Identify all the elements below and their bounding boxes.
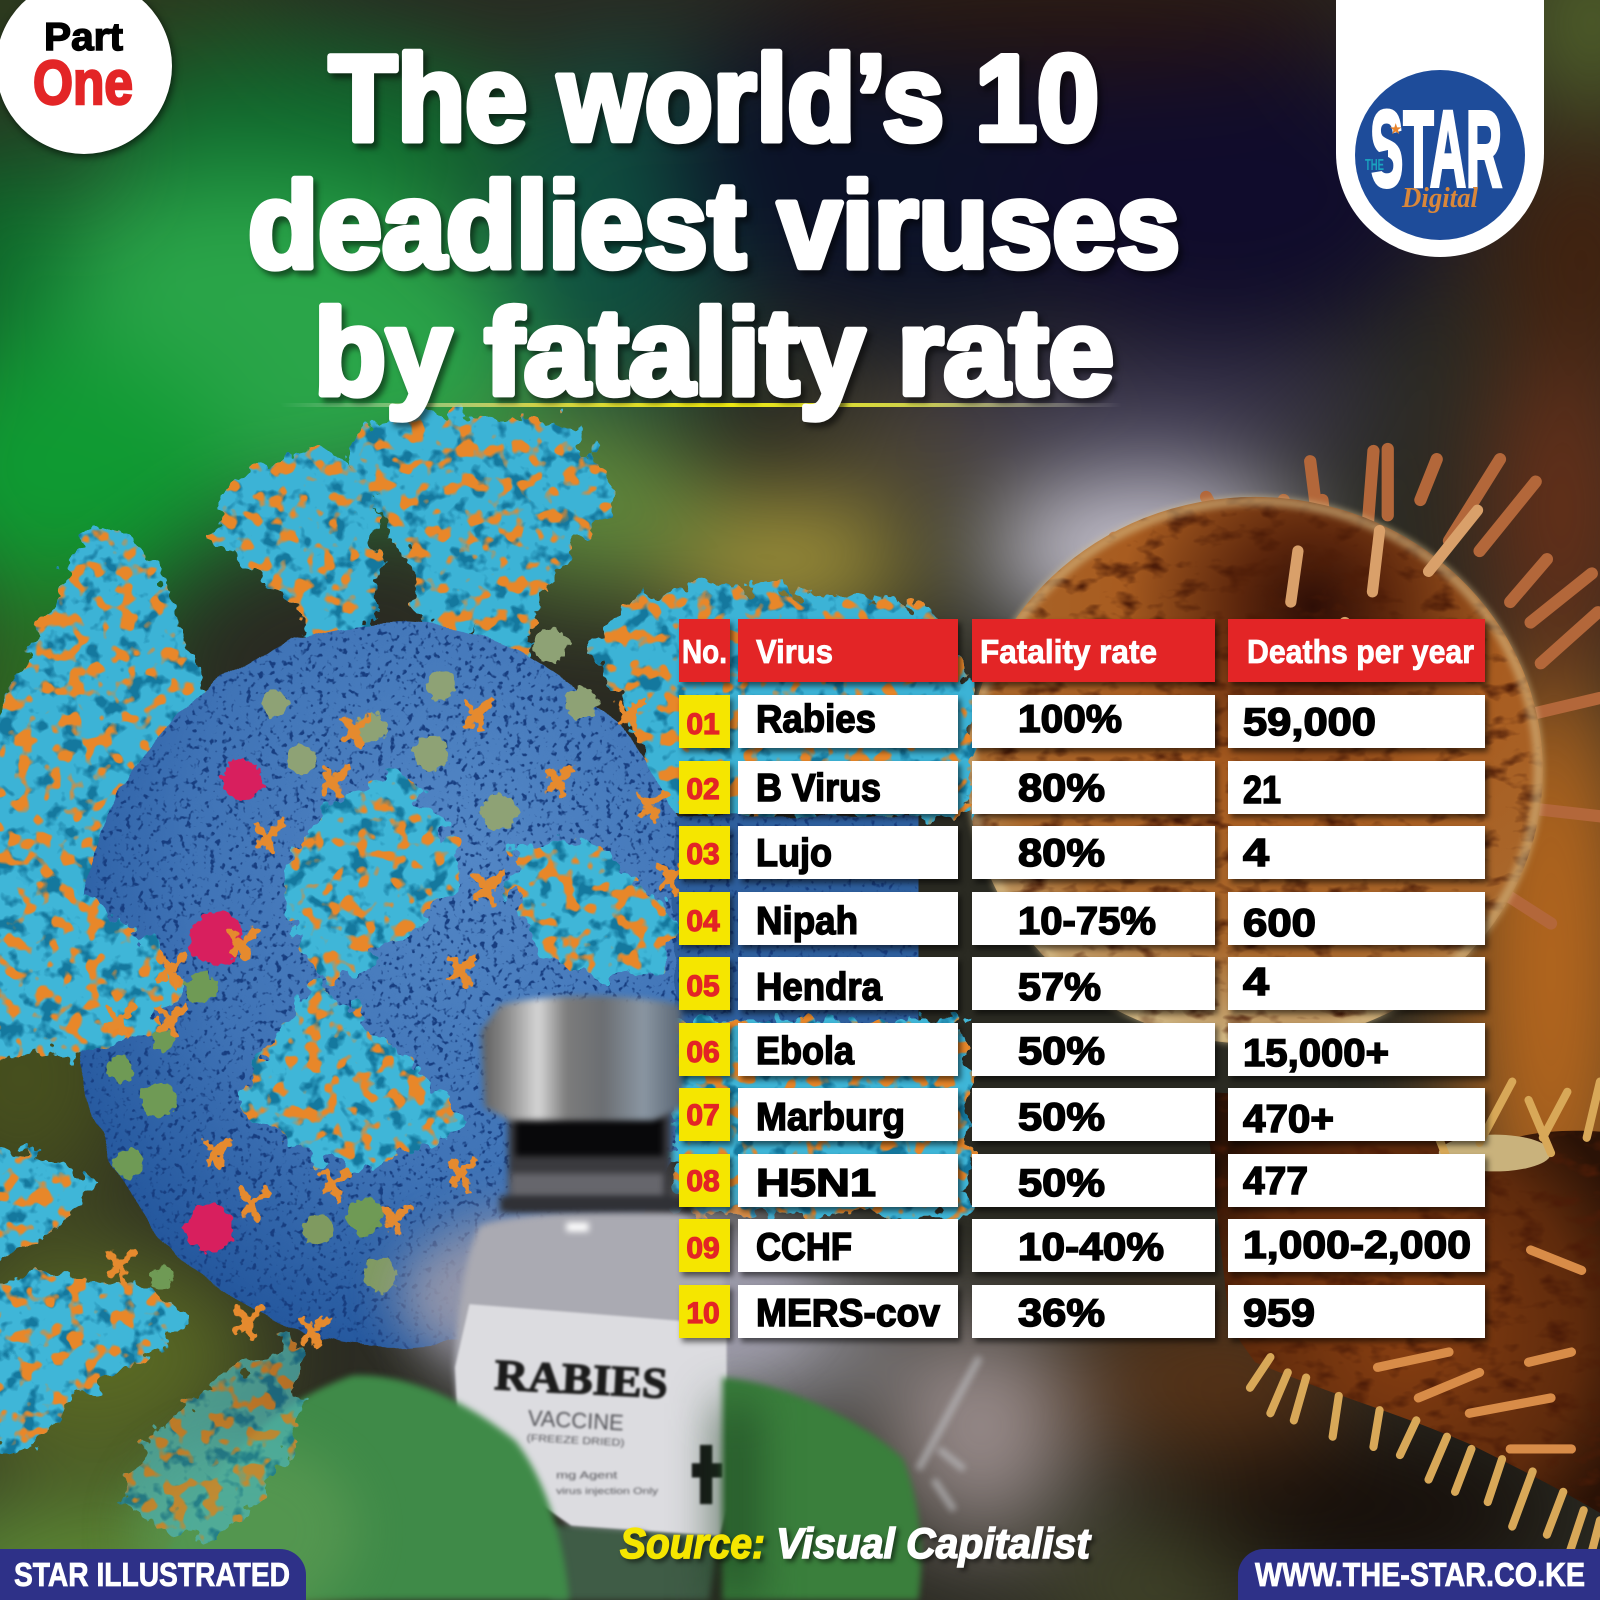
row 09: 09	[686, 1232, 720, 1265]
illustration: brown virus upper right	[967, 449, 1600, 1044]
body of lower brown virus	[1204, 1092, 1600, 1520]
row 04	[679, 892, 1485, 945]
sphere	[71, 622, 714, 1347]
label text: RABIES: RABIES	[493, 1352, 669, 1408]
row 08	[679, 1154, 1485, 1207]
row 02: 21	[1243, 769, 1281, 812]
label cross	[692, 1445, 722, 1504]
surface glycan patches	[107, 628, 598, 1293]
badge: Part One: Part	[44, 16, 123, 59]
row 01: Rabies	[756, 698, 876, 741]
footer tab: website	[1238, 1549, 1600, 1600]
row 07: Marburg	[756, 1096, 905, 1139]
illustration: rabies vaccine vial: virus injection Only	[556, 1486, 659, 1496]
row 08: H5N1	[756, 1162, 876, 1205]
row 02: 02	[686, 773, 720, 806]
illustration: left glove	[133, 1375, 569, 1600]
row 02	[679, 761, 1485, 814]
spikes of upper brown virus	[1114, 449, 1600, 923]
row 04: 600	[1243, 902, 1316, 945]
row 07: 470+	[1243, 1098, 1334, 1141]
vial shoulder shadow	[500, 1196, 694, 1212]
vial base glass	[541, 1525, 719, 1600]
row 04: Nipah	[756, 900, 858, 943]
row 04: 04	[686, 905, 720, 938]
label small text: mg Agent	[556, 1471, 618, 1482]
table header: Fatality rate	[980, 633, 1157, 670]
row 05: 57%	[1018, 966, 1101, 1009]
row 03: 4	[1243, 832, 1269, 875]
cream cap	[1439, 1135, 1551, 1171]
source line: Source:	[620, 1520, 765, 1568]
row 08: 50%	[1018, 1162, 1105, 1205]
row 07	[679, 1088, 1485, 1141]
row 01	[679, 695, 1485, 748]
rear spike proteins	[0, 413, 969, 939]
source line	[620, 1520, 1092, 1568]
front spike proteins	[0, 774, 969, 1454]
row 03	[679, 826, 1485, 879]
row 09: 1,000-2,000	[1243, 1224, 1471, 1267]
row 03: Lujo	[756, 832, 832, 875]
logo: The Star Digital: THE	[1365, 157, 1384, 174]
sphere extension behind table	[673, 816, 969, 1092]
row 08: 08	[686, 1165, 720, 1198]
footer tab: Star Illustrated: STAR ILLUSTRATED	[14, 1556, 290, 1593]
row 06: Ebola	[756, 1030, 854, 1073]
highlight	[566, 1222, 589, 1232]
label text: VACCINE: VACCINE	[527, 1406, 624, 1436]
fog over lower right of sphere	[398, 1204, 806, 1388]
row 10: 10	[686, 1297, 720, 1330]
orange sprigs on surface	[109, 701, 685, 1346]
source line: Visual Capitalist	[776, 1520, 1092, 1568]
vial glass body	[454, 1209, 727, 1536]
row 06	[679, 1023, 1485, 1076]
body of upper brown virus	[967, 497, 1543, 1044]
table	[679, 619, 1485, 1338]
faded spike protein lower left	[128, 1337, 300, 1541]
logo: The Star Digital: Digital	[1401, 182, 1479, 214]
badge: Part One	[0, 0, 172, 154]
row 06: 06	[686, 1036, 720, 1069]
row 04: 10-75%	[1018, 900, 1156, 943]
title: The world’s 10	[329, 30, 1099, 166]
logo: The Star Digital: ★	[1389, 120, 1402, 138]
row 10: MERS-cov	[756, 1292, 940, 1335]
title: by fatality rate	[314, 284, 1114, 420]
row 10: 36%	[1018, 1292, 1105, 1335]
row 07: 50%	[1018, 1096, 1105, 1139]
table header: No.	[682, 633, 727, 670]
row 09: CCHF	[756, 1226, 852, 1269]
row 03: 03	[686, 838, 720, 871]
row 08: 477	[1243, 1160, 1308, 1203]
table header	[679, 619, 1485, 682]
rim of upper brown virus	[971, 501, 1539, 1040]
label text: freeze dried: (FREEZE DRIED)	[526, 1433, 625, 1449]
illustration: right glove and syringe	[722, 1357, 980, 1600]
row 05: Hendra	[756, 966, 882, 1009]
row 01: 01	[686, 708, 720, 741]
illustration: brown virus lower right	[1204, 1082, 1600, 1567]
vial label	[455, 1304, 727, 1536]
row 06: 15,000+	[1243, 1032, 1389, 1075]
row 10	[679, 1285, 1485, 1338]
fringe spikes	[1250, 1082, 1600, 1567]
footer tab: Star Illustrated	[0, 1549, 306, 1600]
row 05	[679, 957, 1485, 1010]
row 06: 50%	[1018, 1030, 1105, 1073]
title underline	[280, 403, 1122, 407]
pink surface markers	[185, 760, 262, 1252]
orange surface hairs	[1378, 1250, 1582, 1449]
row 09	[679, 1219, 1485, 1272]
vial neck	[508, 1102, 671, 1209]
row 02: 80%	[1018, 767, 1105, 810]
vial aluminium cap	[482, 996, 684, 1120]
row 01: 59,000	[1243, 701, 1376, 744]
title: deadliest viruses	[248, 157, 1180, 293]
row 10: 959	[1243, 1292, 1315, 1335]
surface spikes	[1291, 510, 1478, 663]
table header: Deaths per year	[1247, 633, 1474, 670]
title	[248, 30, 1180, 420]
row 07: 07	[686, 1099, 720, 1132]
row 09: 10-40%	[1018, 1226, 1164, 1269]
logo: The Star Digital	[1336, 0, 1544, 257]
illustration: coronavirus	[0, 413, 969, 1454]
row 01: 100%	[1018, 698, 1122, 741]
badge: Part One: One	[33, 49, 133, 118]
row 05: 4	[1243, 961, 1269, 1004]
table header: Virus	[756, 633, 833, 670]
illustration: rabies vaccine vial	[454, 996, 727, 1600]
row 05: 05	[686, 970, 720, 1003]
row 02: B Virus	[756, 767, 881, 810]
row 03: 80%	[1018, 832, 1105, 875]
